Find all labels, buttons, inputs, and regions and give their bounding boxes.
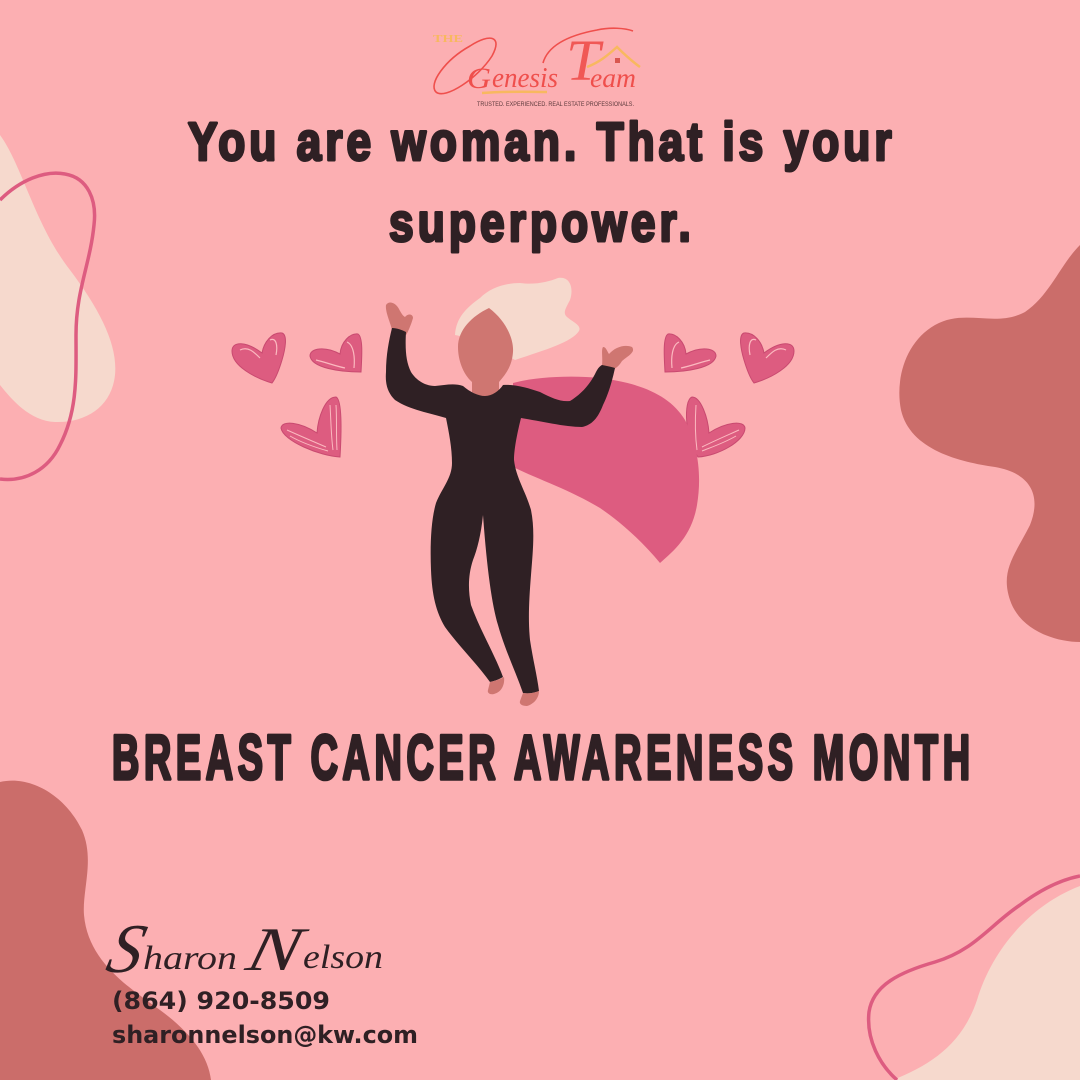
heart: left far xyxy=(232,333,285,383)
signature: Sharon Nelson: haron xyxy=(143,940,237,977)
face and neck xyxy=(458,308,513,400)
heart: left lower xyxy=(281,397,341,457)
left hand xyxy=(386,302,413,335)
contact: email: sharonnelson@kw.com xyxy=(112,1021,418,1049)
heading: quote: superpower. xyxy=(389,193,691,253)
right hand xyxy=(602,346,633,369)
signature: Sharon Nelson: elson xyxy=(303,939,383,976)
heart: right lower behind cape xyxy=(686,397,745,457)
logo: The Genesis Team: eam xyxy=(590,63,636,93)
heading: awareness month: BREAST CANCER AWARENESS MONTH xyxy=(112,723,970,794)
blob: bottom left rust xyxy=(0,781,211,1080)
heart: left near xyxy=(310,334,362,372)
hair xyxy=(455,278,580,360)
logo: The Genesis Team: T xyxy=(566,28,604,93)
signature: Sharon Nelson: S xyxy=(100,911,153,988)
heart: right near xyxy=(664,334,716,372)
signature: Sharon Nelson xyxy=(100,911,383,988)
heading: quote xyxy=(188,112,892,253)
right foot xyxy=(520,691,539,706)
black bodysuit xyxy=(386,328,615,693)
logo: The Genesis Team xyxy=(433,28,640,108)
blob: right rust xyxy=(899,245,1080,642)
left foot xyxy=(488,677,504,694)
contact: phone: (864) 920-8509 xyxy=(112,987,330,1015)
logo: The Genesis Team: TRUSTED. EXPERIENCED. REAL ESTATE PROFESSIONALS. xyxy=(477,102,634,108)
blob: top left cream with outline xyxy=(0,135,115,479)
heading: quote: You are woman. That is your xyxy=(188,112,892,172)
logo: The Genesis Team: enesis xyxy=(492,63,558,94)
logo: The Genesis Team: G xyxy=(467,62,491,95)
blob: bottom right cream with outline xyxy=(869,876,1080,1080)
illustration: superhero woman xyxy=(386,278,699,706)
cape xyxy=(513,377,699,563)
logo: The Genesis Team: THE xyxy=(433,33,463,45)
heart: right far xyxy=(741,333,794,383)
signature: Sharon Nelson: N xyxy=(239,915,313,984)
